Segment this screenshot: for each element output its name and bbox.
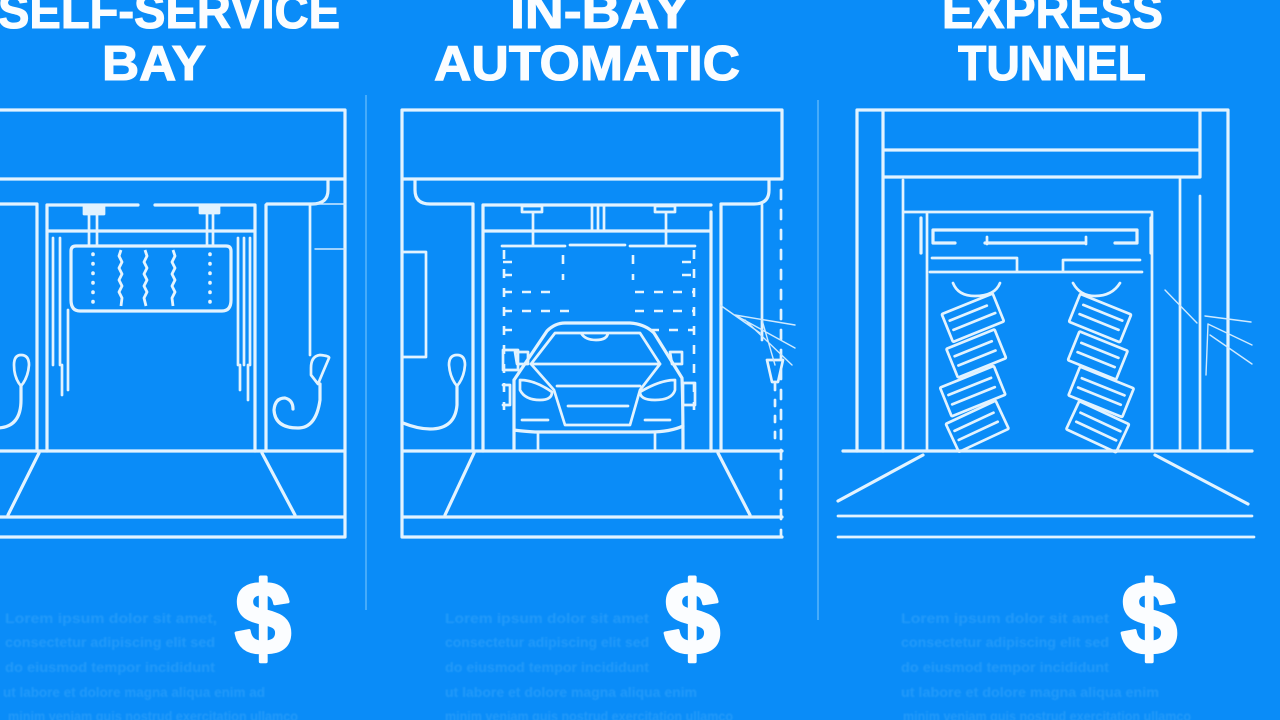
panel: self-service bay bbox=[0, 0, 345, 720]
wand and hose left bbox=[403, 355, 465, 429]
left brush stack bbox=[940, 294, 1009, 452]
overhead gantry bbox=[921, 218, 1151, 296]
canopy and frame bbox=[0, 110, 345, 537]
description text: consectetur adipiscing elit sed bbox=[5, 634, 215, 650]
right broken edge bbox=[780, 190, 782, 537]
price icon: $ bbox=[235, 561, 291, 676]
wand and hose left bbox=[0, 355, 29, 428]
panel: in-bay automatic bbox=[402, 0, 795, 720]
divider: left bbox=[365, 95, 367, 610]
brush frame bbox=[502, 245, 695, 410]
description text: do eiusmod tempor incididunt bbox=[901, 659, 1109, 675]
description text: consectetur adipiscing elit sed bbox=[901, 634, 1109, 650]
car bbox=[514, 323, 683, 450]
divider: right bbox=[817, 100, 819, 620]
price icon: $ bbox=[1121, 561, 1177, 676]
right brush stack bbox=[1066, 294, 1134, 452]
description text: do eiusmod tempor incididunt bbox=[5, 659, 215, 675]
wand and hose right bbox=[274, 204, 329, 428]
diagram: in-bay automatic bbox=[402, 110, 795, 537]
heading: express tunnel: TUNNEL bbox=[958, 37, 1146, 91]
faint ledges bbox=[312, 204, 345, 249]
canopy and frame bbox=[402, 110, 782, 537]
heading: self-service bay bbox=[0, 0, 340, 91]
diagram: express tunnel bbox=[838, 110, 1254, 537]
floor perspective lines bbox=[445, 453, 750, 515]
description text: Lorem ipsum dolor sit amet bbox=[445, 610, 649, 626]
sketch scratches bbox=[720, 305, 795, 365]
wand and hose right bbox=[762, 205, 783, 440]
heading: in-bay automatic: AUTOMATIC bbox=[434, 37, 740, 91]
brush unit bbox=[71, 206, 231, 311]
price icon: $ bbox=[664, 561, 720, 676]
wall panel bbox=[403, 252, 426, 357]
description text: Lorem ipsum dolor sit amet bbox=[901, 610, 1109, 626]
description text: consectetur adipiscing elit sed bbox=[445, 634, 649, 650]
heading: self-service bay: BAY bbox=[102, 37, 206, 91]
description text bbox=[445, 610, 733, 720]
tunnel frame bbox=[857, 110, 1228, 451]
description text: ut labore et dolore magna aliqua enim ad bbox=[3, 684, 265, 700]
heading: express tunnel bbox=[942, 0, 1163, 91]
diagram: self-service bay bbox=[0, 110, 345, 537]
floor line and perspective bbox=[838, 451, 1252, 504]
heading: in-bay automatic bbox=[434, 0, 740, 91]
pipe and columns bbox=[0, 180, 328, 451]
description text: Lorem ipsum dolor sit amet, bbox=[5, 610, 217, 626]
description text: ut labore et dolore magna aliqua enim bbox=[445, 684, 697, 700]
description text bbox=[901, 610, 1191, 720]
panel: express tunnel bbox=[838, 0, 1254, 720]
sketch scratches bbox=[1165, 290, 1252, 375]
description text: ut labore et dolore magna aliqua enim bbox=[901, 684, 1159, 700]
floor stripes bbox=[838, 516, 1254, 537]
side pipes bbox=[53, 238, 250, 400]
description text bbox=[3, 610, 298, 720]
hanger mounts bbox=[522, 206, 675, 245]
floor perspective lines bbox=[8, 453, 295, 515]
description text: do eiusmod tempor incididunt bbox=[445, 659, 649, 675]
pipes and columns bbox=[415, 180, 769, 451]
